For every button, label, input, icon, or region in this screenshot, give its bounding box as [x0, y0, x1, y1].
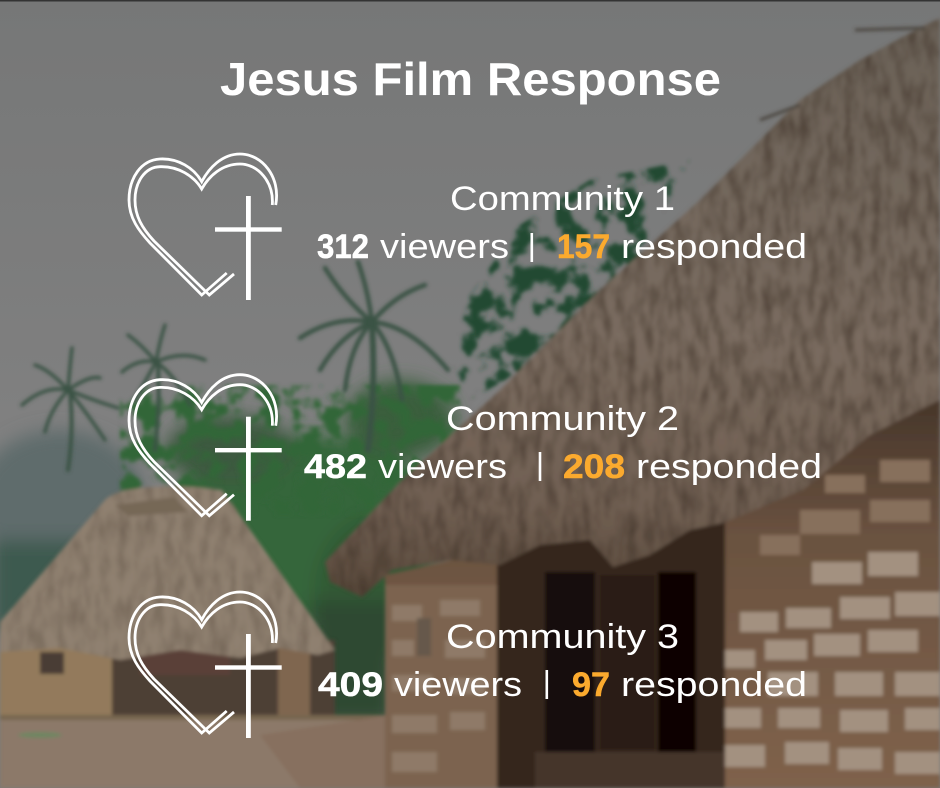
label: community 3: Community 3 [446, 618, 679, 656]
label: community 1: Community 1 [450, 180, 675, 218]
stats: community 1: 312 [317, 228, 369, 266]
palm fronds [368, 325, 373, 450]
community 3 row [129, 592, 807, 738]
icon: heart and cross 1 [129, 154, 282, 300]
stats: community 3: 409 [318, 666, 383, 704]
large hut roof [325, 18, 940, 597]
stats: community 2: responded [636, 448, 822, 486]
stats: community 3: 97 [572, 666, 610, 704]
stats: community 1 [317, 228, 807, 266]
stats: community 2: 208 [563, 448, 625, 486]
bricks [725, 552, 940, 774]
label: community 2: Community 2 [446, 400, 679, 438]
community 1 row [129, 154, 807, 300]
stats: community 3: viewers [394, 666, 522, 704]
title: Jesus Film Response [220, 53, 721, 105]
stats: community 3: responded [621, 666, 807, 704]
stats: community 2: 482 [304, 448, 367, 486]
foliage speckles [450, 160, 690, 400]
small hut [0, 640, 335, 718]
stats: community 1: responded [621, 228, 807, 266]
stats: community 2 [304, 448, 822, 486]
stats: community 3 [318, 666, 807, 704]
large hut wall [385, 370, 940, 788]
stats: community 1: 157 [557, 228, 610, 266]
stats: community 2: viewers [378, 448, 507, 486]
ground [0, 715, 400, 788]
icon: heart and cross 3 [129, 592, 282, 738]
community 2 row [129, 375, 822, 521]
icon: heart and cross 2 [129, 375, 282, 521]
stats: community 1: viewers [380, 228, 509, 266]
